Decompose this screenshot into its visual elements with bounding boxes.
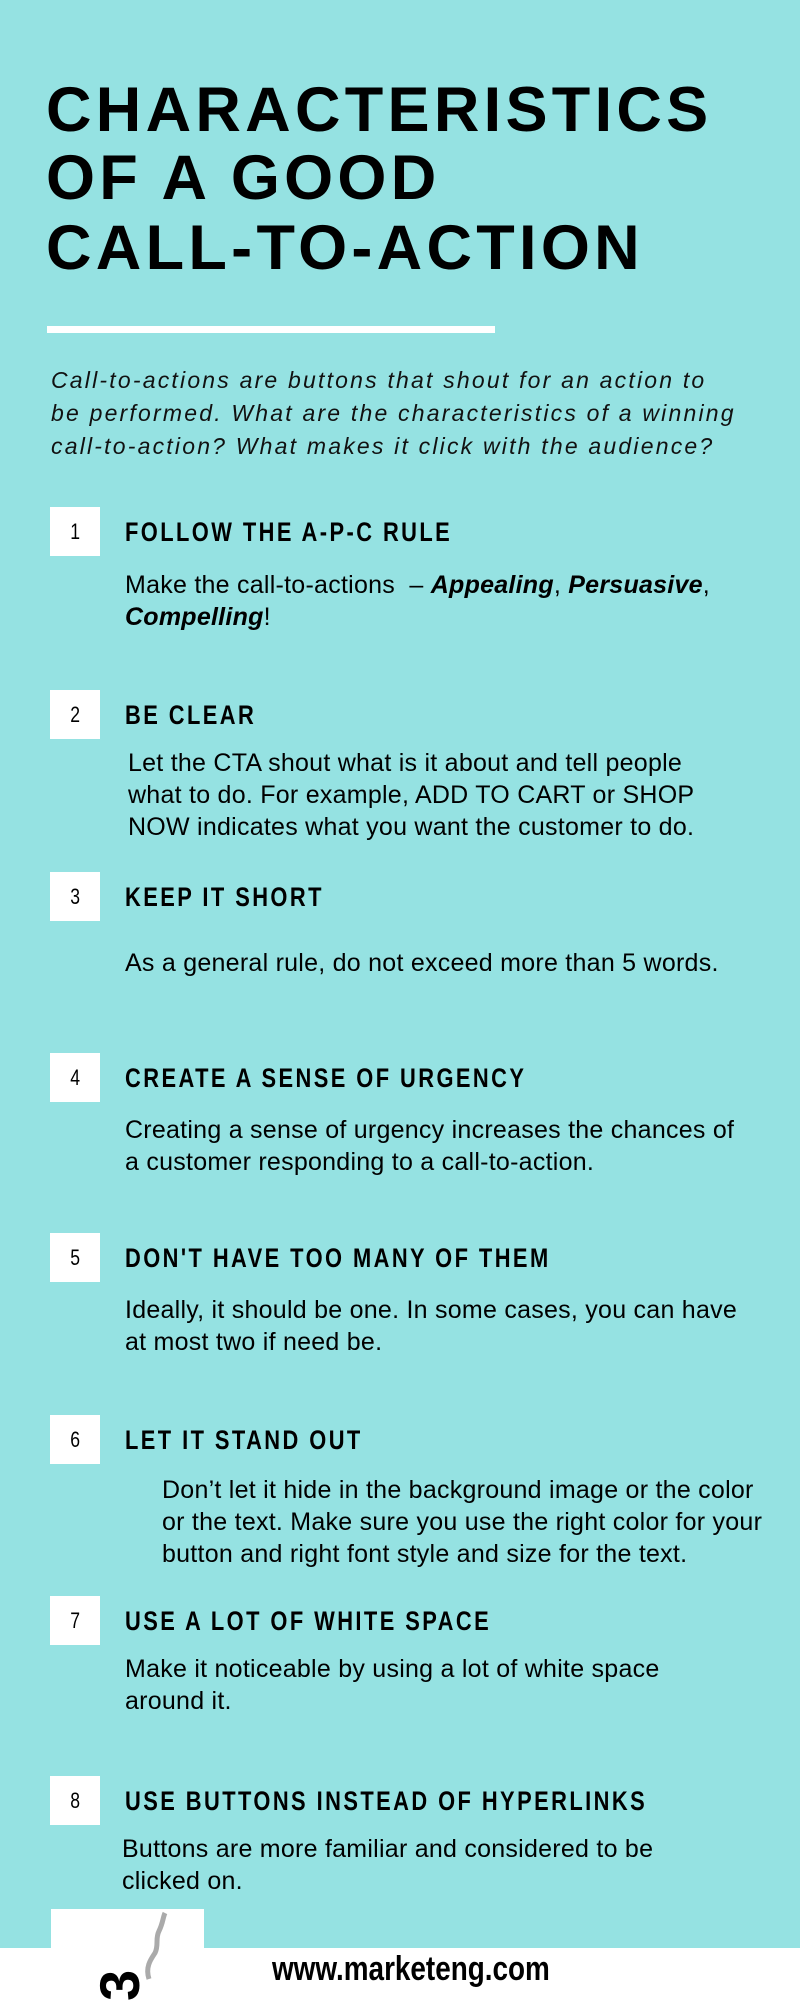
item 8	[50, 1776, 653, 1895]
number badge 2: 2	[70, 702, 80, 727]
body 4	[125, 1116, 734, 1176]
body 4: a customer responding to a call-to-action.	[125, 1148, 594, 1176]
number badge 7	[50, 1596, 100, 1645]
number badge 1	[50, 507, 100, 556]
intro text	[51, 367, 736, 459]
body 1: Make the call-to-actions – Appealing, Persuasive,	[125, 571, 710, 599]
body 7: Make it noticeable by using a lot of white space	[125, 1655, 660, 1683]
body 2: what to do. For example, ADD TO CART or SHOP	[128, 781, 694, 809]
heading 5: DON'T HAVE TOO MANY OF THEM	[125, 1243, 551, 1273]
number badge 5: 5	[70, 1245, 80, 1270]
body 2: NOW indicates what you want the customer to do.	[128, 813, 694, 841]
title: OF A GOOD	[46, 143, 441, 213]
item 7	[50, 1596, 660, 1715]
heading 1: FOLLOW THE A-P-C RULE	[125, 517, 452, 547]
body 8: clicked on.	[122, 1867, 243, 1895]
body 5	[125, 1296, 737, 1356]
intro text: Call-to-actions are buttons that shout for an action to	[51, 367, 706, 393]
body 7: around it.	[125, 1687, 232, 1715]
footer band	[0, 1948, 800, 2008]
item 1	[50, 507, 710, 631]
logo	[51, 1909, 204, 2000]
body 4: Creating a sense of urgency increases the chances of	[125, 1116, 734, 1144]
website url: www.marketeng.com	[272, 1950, 550, 1988]
body 2	[128, 749, 694, 841]
number badge 8: 8	[70, 1788, 80, 1813]
number badge 3: 3	[70, 884, 80, 909]
body 5: at most two if need be.	[125, 1328, 382, 1356]
number badge 6	[50, 1415, 100, 1464]
body 6: or the text. Make sure you use the right color for your	[162, 1508, 762, 1536]
body 1: Compelling!	[125, 603, 271, 631]
heading 2: BE CLEAR	[125, 700, 256, 730]
item 6	[50, 1415, 762, 1568]
number badge 6: 6	[70, 1427, 80, 1452]
number badge 4: 4	[70, 1065, 80, 1090]
heading 8: USE BUTTONS INSTEAD OF HYPERLINKS	[125, 1786, 647, 1816]
body 8	[122, 1835, 653, 1895]
heading 7: USE A LOT OF WHITE SPACE	[125, 1606, 491, 1636]
title: CHARACTERISTICS	[46, 75, 713, 145]
heading 6: LET IT STAND OUT	[125, 1425, 363, 1455]
body 7	[125, 1655, 660, 1715]
item 5	[50, 1233, 737, 1356]
body 6: Don’t let it hide in the background image or the color	[162, 1476, 754, 1504]
body 3: As a general rule, do not exceed more than 5 words.	[125, 949, 719, 977]
body 1	[125, 571, 710, 631]
title: CALL-TO-ACTION	[46, 213, 644, 283]
body 6: button and right font style and size for the text.	[162, 1540, 687, 1568]
heading 3: KEEP IT SHORT	[125, 882, 324, 912]
title	[46, 75, 713, 283]
item 4	[50, 1053, 734, 1176]
title underline	[47, 326, 495, 333]
body 8: Buttons are more familiar and considered to be	[122, 1835, 653, 1863]
heading 4: CREATE A SENSE OF URGENCY	[125, 1063, 526, 1093]
intro text: be performed. What are the characteristics of a winning	[51, 400, 736, 426]
body 5: Ideally, it should be one. In some cases, you can have	[125, 1296, 737, 1324]
number badge 7: 7	[70, 1608, 80, 1633]
number badge 8	[50, 1776, 100, 1825]
number badge 3	[50, 872, 100, 921]
number badge 2	[50, 690, 100, 739]
number badge 1: 1	[70, 519, 80, 544]
body 6	[162, 1476, 762, 1568]
intro text: call-to-action? What makes it click with the audience?	[51, 433, 714, 459]
body 2: Let the CTA shout what is it about and tell people	[128, 749, 682, 777]
number badge 4	[50, 1053, 100, 1102]
item 2	[50, 690, 694, 841]
item 3	[50, 872, 719, 977]
number badge 5	[50, 1233, 100, 1282]
